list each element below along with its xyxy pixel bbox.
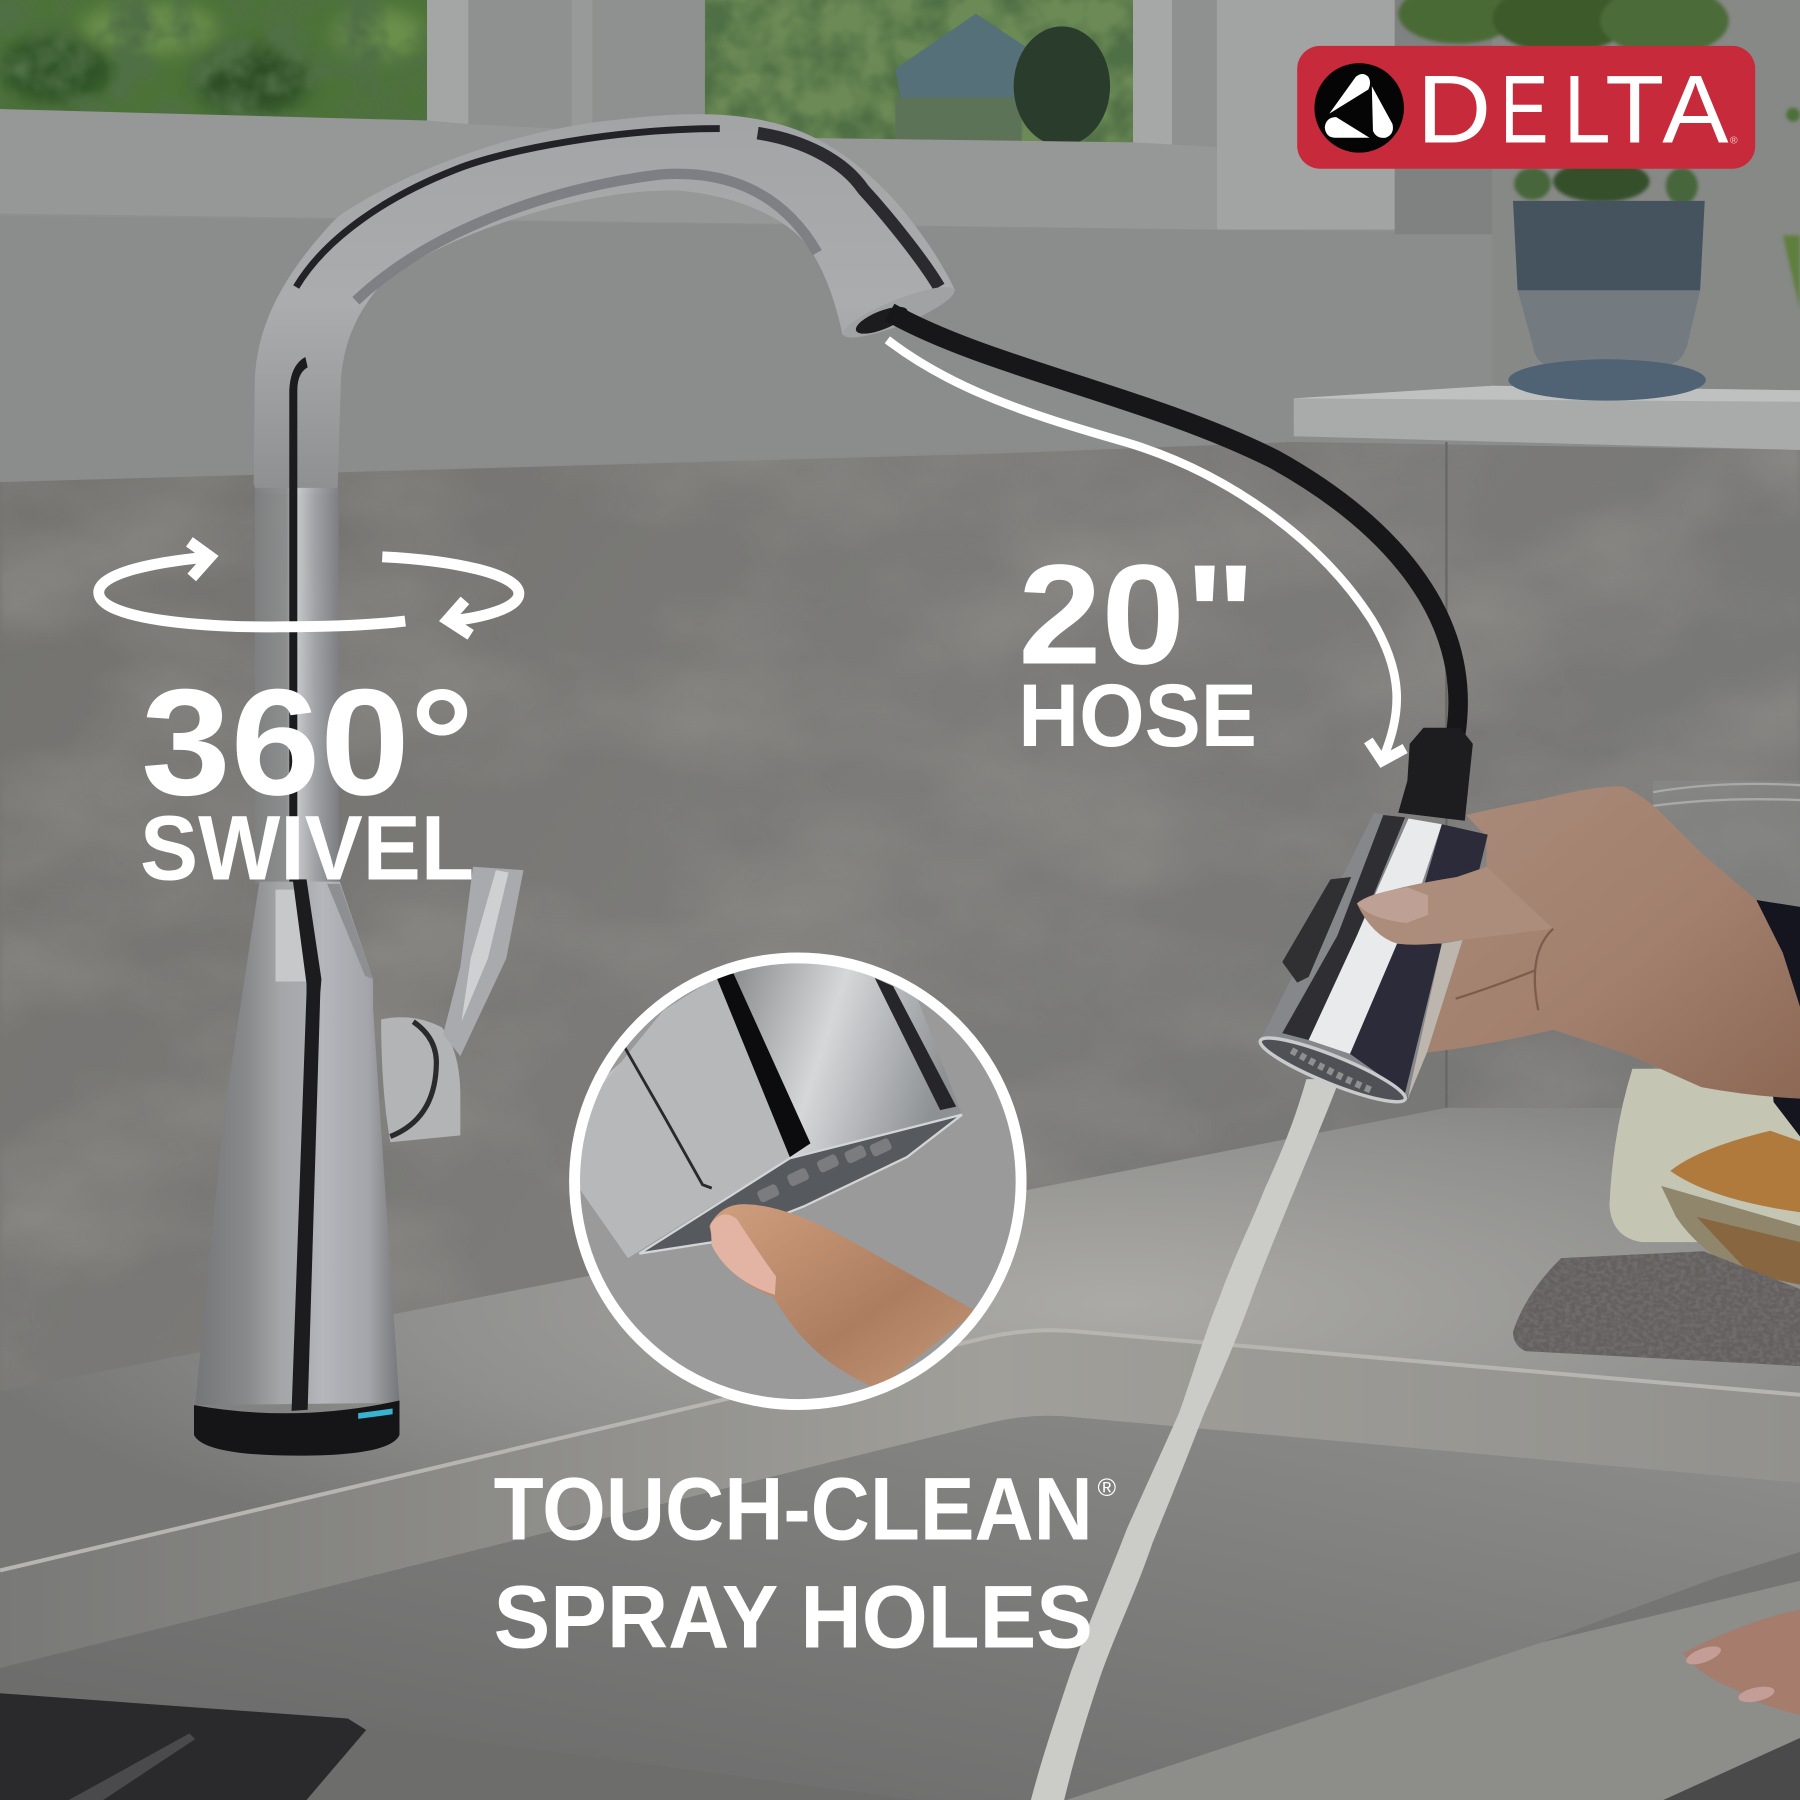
logo badge <box>1297 46 1755 169</box>
sink lip <box>0 1330 1800 1668</box>
right arrow head <box>448 600 471 635</box>
arrow head <box>1368 740 1405 761</box>
head white band <box>1309 818 1442 1054</box>
thumbnail <box>1357 887 1428 923</box>
faucet column <box>255 488 339 884</box>
countertop <box>0 1108 1800 1575</box>
nozzle face <box>639 1115 962 1254</box>
window trim <box>0 0 1395 230</box>
touch indicator <box>358 1409 393 1419</box>
shoulder highlight <box>276 890 308 982</box>
cooktop <box>0 1693 366 1800</box>
handle shadow arc <box>390 1022 436 1136</box>
faucet base ring <box>194 1401 399 1456</box>
window view left <box>0 0 427 121</box>
swivel arrows <box>99 542 519 635</box>
thumb <box>1357 867 1553 945</box>
head skin reflection <box>1407 940 1462 1100</box>
label: touch-clean spray holes <box>494 1458 1116 1666</box>
column dark stripe <box>289 357 308 884</box>
left arc arrow <box>99 557 405 627</box>
pitcher <box>1609 1069 1800 1242</box>
lever shading <box>461 870 509 1022</box>
finger creases <box>1456 929 1553 1010</box>
left arrow head <box>189 542 210 577</box>
second hand <box>1683 1609 1800 1715</box>
still life right <box>1513 781 1800 1715</box>
hand <box>1427 786 1800 1099</box>
logo wordmark: E <box>1500 56 1548 164</box>
hose length arrow <box>887 340 1405 761</box>
finger <box>709 1204 976 1389</box>
sleeve <box>1756 900 1800 1136</box>
pie crust <box>1670 1131 1800 1212</box>
toggle button <box>1282 877 1351 983</box>
pie dish <box>1661 1186 1800 1285</box>
inset ring <box>575 958 1021 1405</box>
logo wordmark: A <box>1662 55 1729 163</box>
plant leaves <box>1398 0 1800 310</box>
glass jar <box>1653 781 1800 1091</box>
nozzles <box>756 1137 893 1203</box>
hose <box>890 312 1458 735</box>
head left dark stripes <box>1282 815 1405 1040</box>
label: 360 degree swivel <box>140 658 474 899</box>
basin floor <box>1066 1552 1800 1800</box>
window view right <box>705 0 1133 146</box>
spray head <box>1255 728 1553 1112</box>
touch-clean: TOUCH-CLEAN <box>494 1458 1093 1558</box>
faucet <box>194 114 959 1456</box>
left face <box>580 979 790 1258</box>
logo wordmark: D <box>1417 56 1491 164</box>
faucet base cone <box>195 882 399 1405</box>
spout shadow band <box>356 174 817 301</box>
inset: touch-clean spray holes <box>551 941 1021 1405</box>
curve <box>887 340 1397 758</box>
logo emblem <box>1314 63 1404 153</box>
water stream <box>1031 1079 1340 1800</box>
cone right facet <box>327 884 373 979</box>
upper wall <box>0 0 1800 494</box>
logo wordmark <box>1417 55 1729 164</box>
spout dark streak nose <box>758 133 939 287</box>
logo wordmark: T <box>1605 56 1664 163</box>
logo registered mark: ® <box>1730 135 1738 146</box>
chrome head <box>602 964 962 1193</box>
basin shadow <box>1541 1552 1800 1643</box>
swivel: SWIVEL <box>140 797 474 899</box>
marble backsplash <box>0 442 1800 1391</box>
sink basin <box>0 1416 1800 1800</box>
fingernail <box>711 1214 776 1295</box>
lower wall band <box>0 216 1492 482</box>
right stripe <box>875 978 956 1110</box>
right arc arrow <box>382 557 519 621</box>
front counter <box>0 1678 918 1800</box>
towel <box>1513 1251 1800 1366</box>
black stripe <box>716 973 810 1157</box>
pot <box>1508 201 1706 401</box>
spout dark streak upper <box>296 129 720 287</box>
seam line <box>624 1047 712 1188</box>
hose connector <box>1398 728 1473 821</box>
registered mark: ® <box>1097 1474 1116 1502</box>
head body <box>1260 813 1488 1100</box>
sink lip highlight <box>0 1330 1800 1570</box>
logo wordmark: L <box>1564 56 1611 164</box>
handle cylinder <box>381 1017 460 1142</box>
20 inch: 20" <box>1018 536 1256 695</box>
spout opening <box>839 278 959 346</box>
base dark reflection <box>292 879 321 1411</box>
360: 360° <box>141 658 474 827</box>
handle <box>381 867 523 1142</box>
faucet spout arc <box>254 114 955 494</box>
plant and pot <box>1398 0 1800 401</box>
spray face <box>1255 1028 1410 1112</box>
head navy upper <box>1421 824 1488 895</box>
hose word: HOSE <box>1018 665 1257 765</box>
inset background <box>575 959 1021 1404</box>
spray holes: SPRAY HOLES <box>494 1566 1093 1666</box>
shelf <box>1294 386 1800 450</box>
basin corner dark <box>1663 1738 1800 1800</box>
head navy lower <box>1350 944 1442 1093</box>
delta logo <box>1297 46 1755 169</box>
side wall <box>1395 0 1492 234</box>
handle lever <box>443 867 523 1056</box>
label: 20 inch hose <box>1018 536 1257 765</box>
